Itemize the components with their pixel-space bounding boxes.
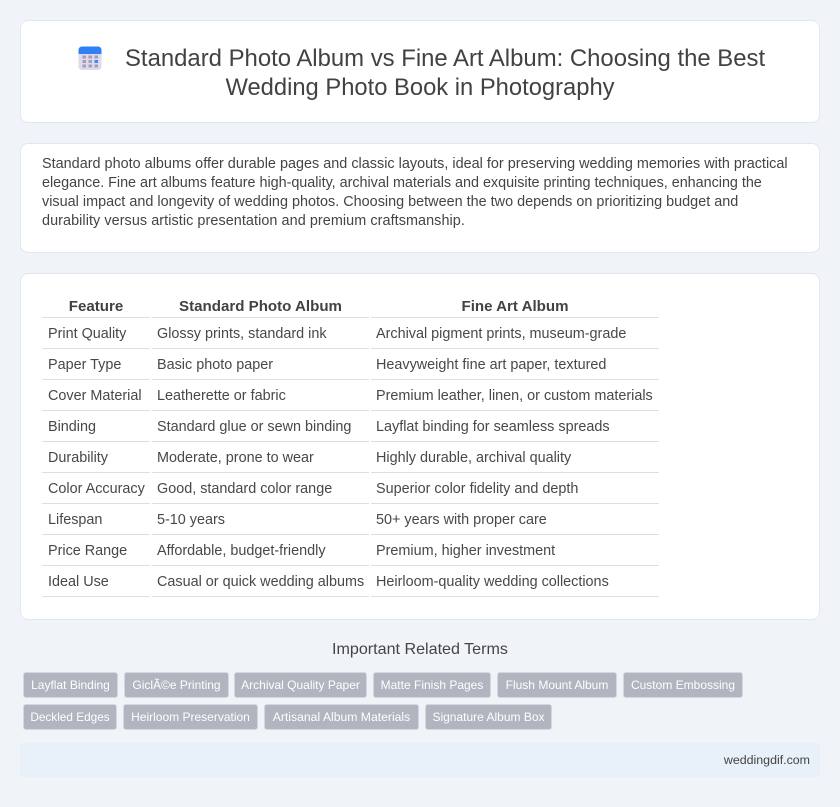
related term tags: GiclÃ©e Printing [132,678,221,692]
comparison table: Feature [69,298,123,315]
comparison table: Lifespan [48,512,102,528]
related term tags: Flush Mount Album [506,678,608,692]
comparison table: Glossy prints, standard ink [157,326,327,342]
comparison table: Ideal Use [48,574,109,590]
intro paragraph: visual impact and longevity of wedding photos. Choosing between the two depends on prioritizing budget and [42,194,738,210]
comparison table: Price Range [48,543,127,559]
comparison table: Premium leather, linen, or custom materials [376,388,653,404]
comparison table: Layflat binding for seamless spreads [376,419,610,435]
comparison table: Print Quality [48,326,126,342]
intro paragraph: elegance. Fine art albums feature high-quality, archival materials and exquisite printing techniques, enhancing the [42,175,762,191]
comparison table: Good, standard color range [157,481,332,497]
comparison table: Affordable, budget-friendly [157,543,326,559]
comparison table: Binding [48,419,96,435]
related term tags: Deckled Edges [30,710,110,724]
comparison table: Leatherette or fabric [157,388,286,404]
comparison table: Cover Material [48,388,142,404]
related term tags: Custom Embossing [631,678,735,692]
comparison table: 50+ years with proper care [376,512,547,528]
panel: intro text [20,143,820,253]
intro paragraph: Standard photo albums offer durable pages and classic layouts, ideal for preserving wedding memories with practical [42,156,788,172]
intro paragraph [42,156,788,229]
related term tags: Heirloom Preservation [131,710,250,724]
icon: calendar [78,46,102,70]
comparison table: Superior color fidelity and depth [376,481,578,497]
comparison table: Premium, higher investment [376,543,555,559]
related term tags: Signature Album Box [432,710,545,724]
footer bar [20,743,820,777]
related term tags: Artisanal Album Materials [273,710,410,724]
comparison table: Paper Type [48,357,121,373]
footer source: weddingdif.com [724,753,810,767]
comparison table: Standard glue or sewn binding [157,419,351,435]
comparison table: Heirloom-quality wedding collections [376,574,609,590]
related term tags: Archival Quality Paper [241,678,360,692]
comparison table [42,298,659,597]
title [125,45,765,101]
comparison table: Archival pigment prints, museum-grade [376,326,626,342]
title: Wedding Photo Book in Photography [225,74,615,101]
comparison table: Moderate, prone to wear [157,450,314,466]
comparison table: Basic photo paper [157,357,273,373]
comparison table: Casual or quick wedding albums [157,574,364,590]
comparison table: Highly durable, archival quality [376,450,571,466]
intro paragraph: durability versus artistic presentation and premium craftsmanship. [42,213,465,229]
related term tags [23,672,743,730]
panel: comparison table [20,273,820,620]
title: Standard Photo Album vs Fine Art Album: Choosing the Best [125,45,765,72]
related term tags: Layflat Binding [31,678,110,692]
panel: title header [20,20,820,123]
comparison table: Color Accuracy [48,481,145,497]
comparison table: Heavyweight fine art paper, textured [376,357,606,373]
comparison table: Standard Photo Album [179,298,342,315]
heading: related terms: Important Related Terms [332,640,508,658]
comparison table: Durability [48,450,108,466]
comparison table: 5-10 years [157,512,225,528]
comparison table: Fine Art Album [461,298,569,315]
related term tags: Matte Finish Pages [381,678,483,692]
